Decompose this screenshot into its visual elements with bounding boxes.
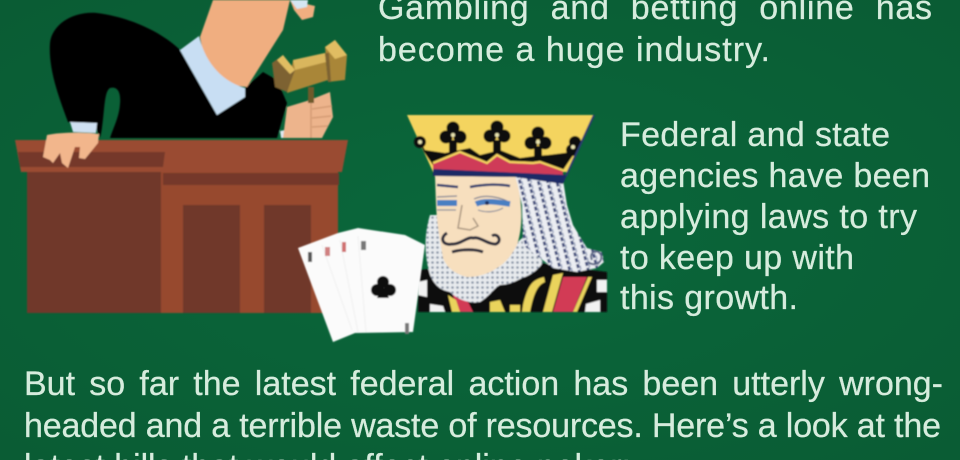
crown clubs bbox=[414, 120, 581, 156]
card corner pips bbox=[308, 241, 409, 334]
robe red stripes bbox=[453, 277, 587, 312]
judge collar bbox=[180, 36, 245, 115]
crown edge bbox=[566, 115, 594, 176]
desk panel left bbox=[183, 205, 240, 313]
desk panel right bbox=[264, 205, 311, 313]
intro paragraph: become a huge industry. bbox=[378, 31, 770, 69]
desk band bbox=[163, 173, 339, 185]
closing paragraph: headed and a terrible waste of resources. Here’s a look at the bbox=[24, 407, 941, 445]
club pip bbox=[371, 276, 396, 298]
gavel handle bbox=[308, 87, 314, 103]
king eyes and brows bbox=[437, 185, 510, 212]
side paragraph: Federal and state bbox=[620, 116, 890, 154]
desk top shadow bbox=[18, 152, 165, 167]
cards bbox=[298, 228, 425, 342]
hair curl bbox=[588, 251, 601, 264]
king robe bbox=[418, 260, 607, 312]
side paragraph: this growth. bbox=[620, 279, 798, 317]
king moustache bbox=[443, 233, 499, 252]
gavel head bbox=[272, 40, 347, 93]
crown scalloped black band bbox=[417, 135, 580, 170]
closing paragraph: But so far the latest federal action has been utterly wrong- bbox=[24, 365, 943, 403]
king face bbox=[435, 175, 521, 277]
glasses bbox=[290, 0, 308, 9]
crown navy band bbox=[433, 169, 567, 184]
right hand bbox=[283, 92, 333, 138]
finger lines bbox=[311, 100, 332, 138]
judge nose bbox=[290, 0, 315, 20]
judge neck bbox=[200, 0, 290, 87]
side paragraph: to keep up with bbox=[620, 239, 854, 277]
card edges bbox=[322, 236, 366, 332]
judge robe bbox=[50, 13, 287, 138]
crown club highlights bbox=[418, 133, 575, 149]
left cuff bbox=[70, 122, 97, 133]
intro paragraph bbox=[378, 0, 932, 69]
illustration: judge at bench bbox=[15, 0, 348, 313]
king nose bbox=[458, 205, 478, 230]
desk right body bbox=[161, 172, 338, 313]
illustration: king of clubs bbox=[407, 115, 607, 312]
robe white patches bbox=[418, 280, 607, 312]
crown yellow trim bbox=[433, 152, 565, 171]
king long hair stripes bbox=[515, 176, 604, 272]
king curled beard and collar bbox=[426, 215, 543, 303]
illustration: fan of cards bbox=[298, 228, 425, 342]
crown red band bbox=[433, 152, 563, 178]
side paragraph bbox=[620, 116, 930, 317]
desk top bbox=[15, 140, 348, 172]
side paragraph: applying laws to try bbox=[620, 198, 917, 236]
judge right cuff bbox=[280, 130, 285, 138]
left hand bbox=[43, 133, 99, 168]
closing paragraph bbox=[24, 365, 943, 460]
crown bbox=[407, 115, 593, 172]
desk left body bbox=[27, 172, 162, 313]
side paragraph: agencies have been bbox=[620, 157, 930, 195]
robe yellow stripes bbox=[448, 273, 592, 312]
